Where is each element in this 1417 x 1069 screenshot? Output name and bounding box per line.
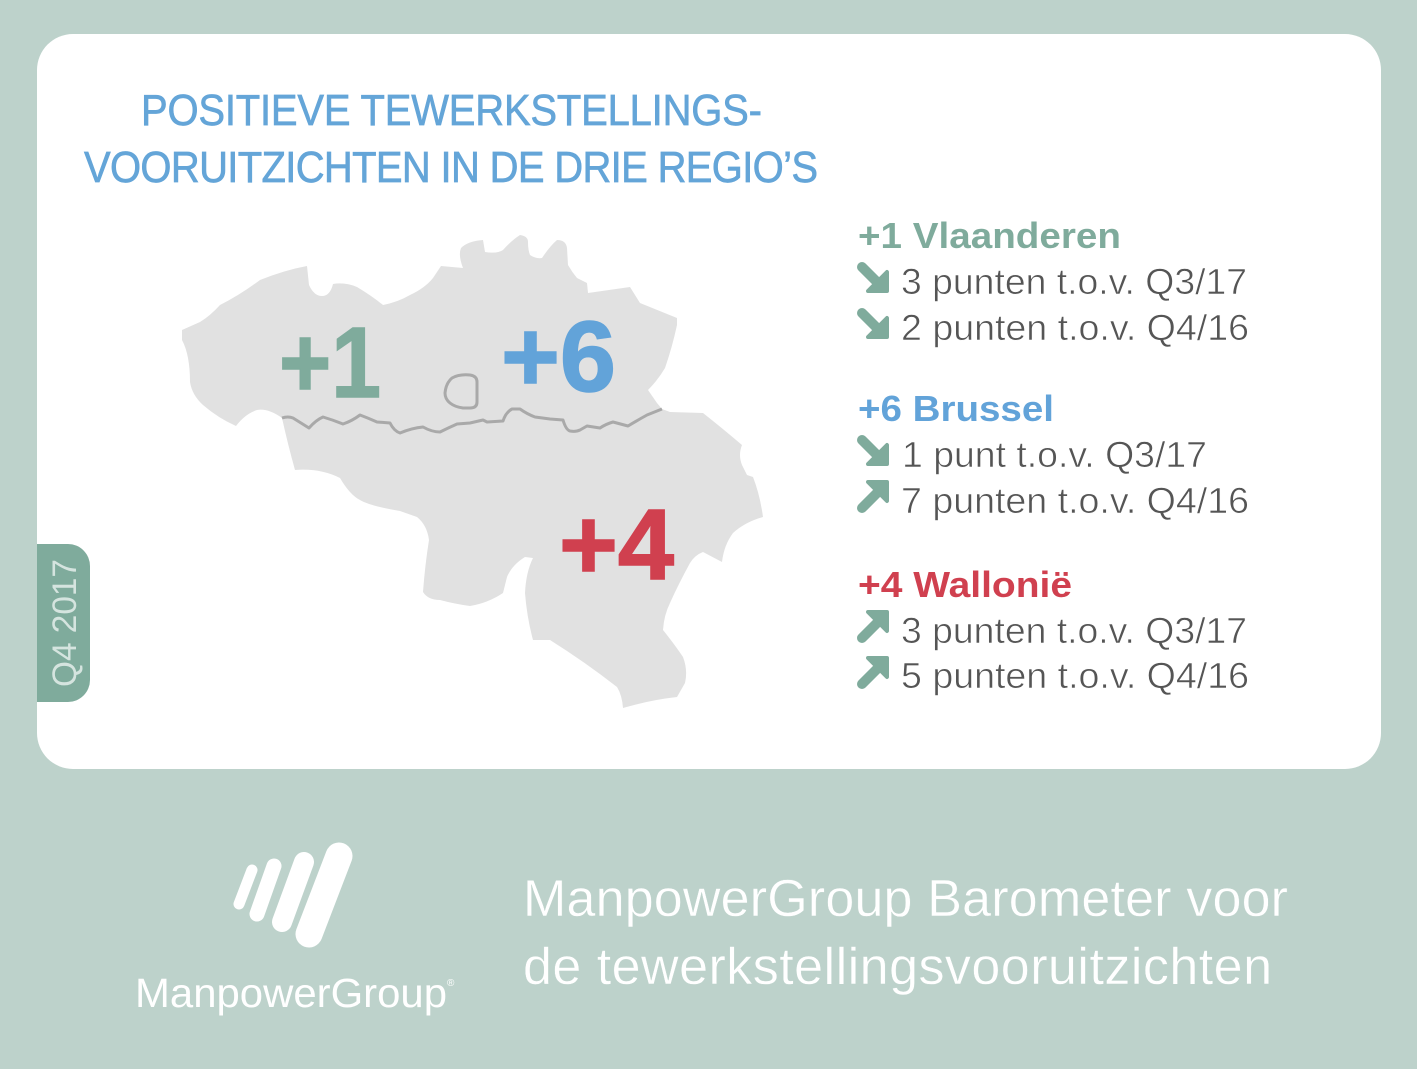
- footer heading: de tewerkstellingsvooruitzichten: [523, 938, 1272, 996]
- arrow: down: [862, 440, 887, 464]
- block: Brussel: 1 punt t.o.v. Q3/17: [902, 434, 1207, 475]
- title: VOORUITZICHTEN IN DE DRIE REGIO’S: [84, 143, 818, 191]
- arrow: down: [862, 267, 887, 291]
- logo wordmark: ManpowerGroup: [135, 970, 447, 1016]
- logo: ManpowerGroup: [135, 856, 455, 1016]
- arrow: up: [862, 482, 887, 508]
- title: [84, 86, 818, 191]
- block: Wallonie: 3 punten t.o.v. Q3/17: [901, 610, 1247, 651]
- arrow: down: [862, 313, 887, 337]
- map of Belgium: [182, 235, 763, 708]
- number: Brussel: +6: [501, 301, 616, 413]
- title: POSITIEVE TEWERKSTELLINGS-: [141, 86, 762, 134]
- arrow: up: [862, 612, 887, 638]
- tab: quarter label: [37, 544, 90, 702]
- block: Vlaanderen: [858, 215, 1249, 348]
- block: Wallonie: [858, 564, 1249, 696]
- block: Brussel: +6 Brussel: [858, 388, 1054, 429]
- block: Wallonie: +4 Wallonië: [858, 564, 1072, 605]
- icon: logo bars: [239, 856, 339, 934]
- map: language border: [282, 409, 662, 433]
- footer heading: ManpowerGroup Barometer voor: [523, 870, 1288, 928]
- map: Brussels outline: [445, 375, 477, 408]
- tab: quarter label: Q4 2017: [46, 559, 84, 687]
- arrow: up: [862, 658, 887, 684]
- registered mark: ®: [447, 978, 455, 989]
- block: Vlaanderen: +1 Vlaanderen: [858, 215, 1121, 256]
- block: Wallonie: 5 punten t.o.v. Q4/16: [901, 655, 1249, 696]
- map: country shape: [182, 235, 763, 708]
- number: Wallonie: +4: [559, 489, 674, 601]
- panel: white card: [37, 34, 1381, 769]
- block: Vlaanderen: 2 punten t.o.v. Q4/16: [901, 307, 1249, 348]
- block: Vlaanderen: 3 punten t.o.v. Q3/17: [901, 261, 1247, 302]
- number: Vlaanderen: +1: [279, 307, 381, 419]
- block: Brussel: 7 punten t.o.v. Q4/16: [901, 480, 1249, 521]
- footer heading: [523, 870, 1288, 996]
- block: Brussel: [858, 388, 1249, 521]
